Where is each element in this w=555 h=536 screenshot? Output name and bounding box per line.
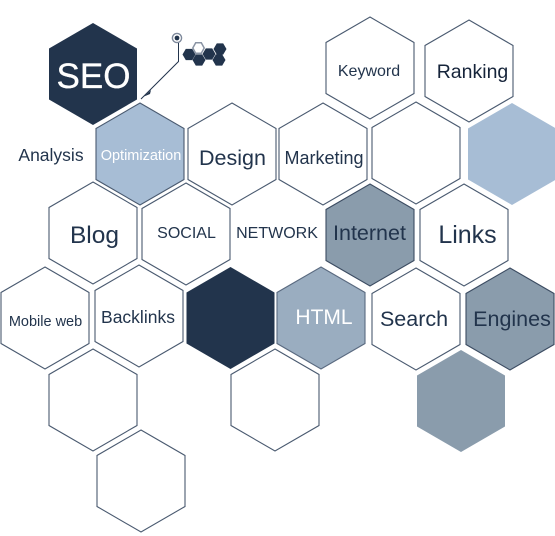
Search hexagon: Search — [380, 307, 448, 331]
Search hexagon — [372, 268, 460, 370]
light blue hexagon — [468, 103, 555, 205]
Backlinks hexagon: Backlinks — [101, 307, 175, 327]
Blog hexagon — [49, 182, 137, 284]
HTML hexagon: HTML — [295, 306, 353, 329]
blank hexagon — [49, 349, 137, 451]
Ranking hexagon — [425, 20, 513, 122]
blank hexagon — [97, 430, 185, 532]
SOCIAL hexagon: SOCIAL — [157, 225, 216, 242]
Optimization hexagon: Optimization — [101, 148, 181, 164]
Keyword hexagon: Keyword — [338, 63, 400, 80]
blank hexagon — [231, 349, 319, 451]
Ranking hexagon: Ranking — [437, 61, 508, 83]
SEO hexagon — [49, 23, 137, 125]
Links hexagon — [420, 184, 508, 286]
SEO hexagon: SEO — [57, 57, 130, 96]
Internet hexagon: Internet — [333, 221, 406, 245]
Analysis label: Analysis — [18, 145, 84, 165]
Engines hexagon — [466, 268, 554, 370]
Keyword hexagon — [326, 17, 414, 119]
Engines hexagon: Engines — [473, 307, 551, 331]
NETWORK label: NETWORK — [236, 225, 318, 242]
HTML hexagon — [277, 267, 365, 369]
Optimization hexagon — [96, 103, 184, 205]
Backlinks hexagon — [95, 265, 183, 367]
blank hexagon — [372, 102, 460, 204]
Blog hexagon: Blog — [70, 222, 119, 249]
Mobile web hexagon — [1, 267, 89, 369]
Design hexagon: Design — [199, 146, 266, 170]
SOCIAL hexagon — [142, 183, 230, 285]
Mobile web hexagon: Mobile web — [9, 314, 82, 330]
connector line with target icon — [141, 33, 182, 99]
Marketing hexagon: Marketing — [284, 148, 364, 168]
Links hexagon: Links — [438, 221, 497, 249]
Marketing hexagon — [279, 103, 367, 205]
Design hexagon — [188, 103, 276, 205]
icon: small hexagon cluster — [182, 43, 226, 66]
Internet hexagon — [326, 184, 414, 286]
dark hexagon — [186, 267, 274, 369]
grey hexagon — [417, 350, 505, 452]
